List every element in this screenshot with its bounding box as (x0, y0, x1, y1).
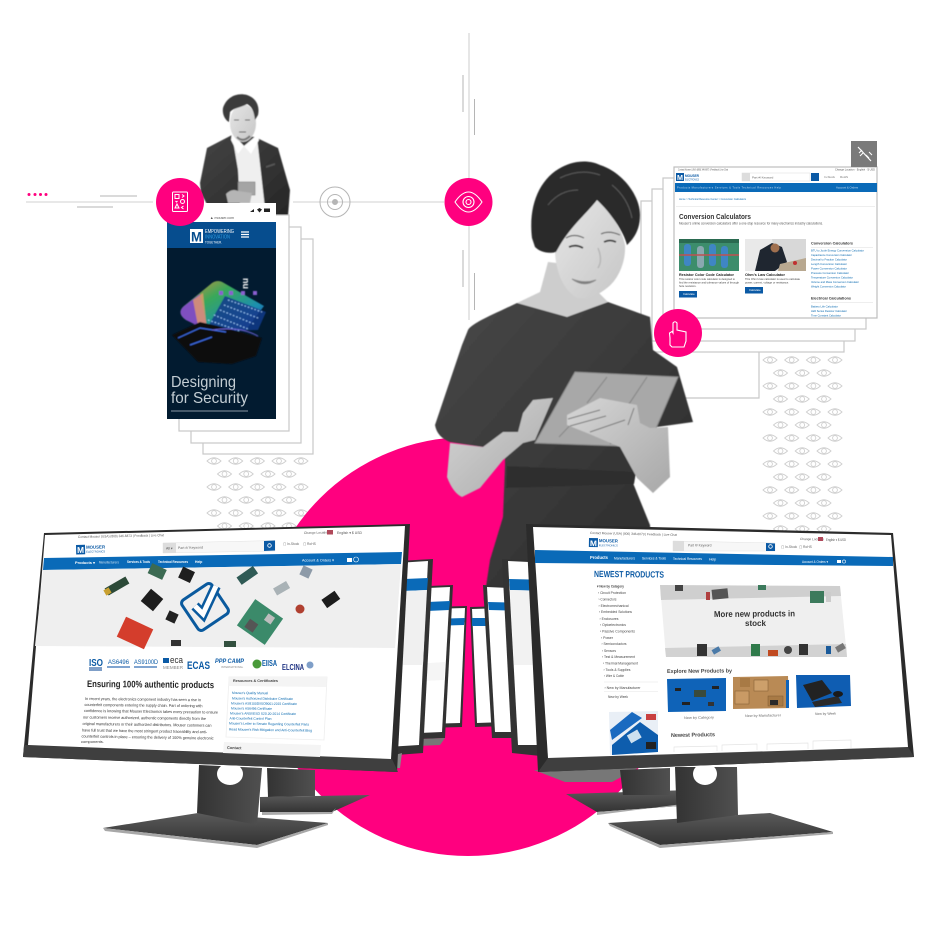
calculator links: Temperature Conversion Calculator (811, 276, 853, 280)
mobile logo: TOGETHER. (205, 240, 222, 244)
explore heading: Explore New Products by (667, 668, 733, 675)
certification logos: AS9100D (134, 659, 158, 666)
calculate buttons (679, 287, 763, 298)
calculators page: hole resistors. (679, 284, 697, 288)
sidebar categories: › Optoelectronics (600, 623, 626, 627)
monitor left 3 (397, 585, 453, 740)
page top bar: Contact Mouser (USA) (800) 346-6873 | Feedback | Live Chat (678, 168, 728, 172)
calculators page: Resistor Color Code Calculator (679, 273, 734, 277)
new products banner (660, 585, 847, 657)
calculator links: Battery Life Calculator (811, 304, 838, 308)
mobile logo: M (191, 228, 202, 244)
sidebar categories: › Thermal Management (603, 662, 638, 666)
pink circle (258, 437, 678, 856)
certification logos: INTERNATIONAL (221, 665, 244, 669)
nav bar: Manufacturers (99, 560, 119, 564)
sidebar categories: › Semiconductors (602, 642, 627, 646)
body paragraph: our customers receive authorized, authentic components directly from the (83, 715, 207, 721)
mobile logo (190, 228, 234, 244)
sidebar categories: › Sensors (602, 649, 616, 653)
newest products title: NEWEST PRODUCTS (594, 569, 664, 580)
mouser logo: MOUSER (599, 538, 619, 544)
page nav: Products Manufacturers Services & Tools Technical Resources Help (677, 186, 782, 190)
sidebar categories: New by Week (608, 695, 628, 699)
status bar icons (250, 208, 270, 212)
monitor right bezel (526, 524, 914, 772)
calculator links: Conversion Calculators (811, 240, 854, 246)
page logo: ELECTRONICS (685, 178, 699, 182)
monitor right screen: English ▾ $ USD (826, 538, 847, 542)
resources panel: Anti-Counterfeit Control Plan (229, 717, 272, 721)
mobile logo: INNOVATION (205, 234, 230, 240)
page logo: M (677, 175, 683, 182)
heading: Ensuring 100% authentic products (87, 679, 214, 691)
monitor left 2 stand (260, 753, 402, 815)
nav bar (535, 550, 893, 566)
calculators page: Ohm's Law Calculator (745, 273, 786, 277)
body paragraph: components. (81, 739, 104, 744)
target icon (320, 187, 350, 217)
certification logos: AS6496 (108, 659, 129, 666)
monitor right 4 (470, 606, 505, 727)
monitor left screen (28, 526, 405, 759)
certification logos: eca (170, 655, 183, 665)
search bar (742, 173, 819, 181)
sidebar categories (596, 584, 641, 699)
calculators page: Mouser's online conversion calculators offer a one-stop resource for many electronics industry calculations. (679, 222, 823, 226)
mobile page (167, 203, 276, 419)
body paragraph: counterfeit controls in place – ensuring the delivery of 100% genuine electronic (81, 734, 214, 741)
hamburger icon (241, 232, 249, 237)
monitor left 4 (425, 606, 467, 728)
mobile headline: Designing (171, 374, 236, 391)
sidebar categories: › Enclosures (600, 617, 619, 621)
left monitor (23, 524, 410, 848)
new products banner: More new products in (714, 608, 795, 619)
components (103, 563, 340, 649)
page logo: MOUSER (685, 174, 699, 178)
sidebar categories: › Circuit Protection (598, 591, 626, 595)
mouser logo: M (590, 539, 597, 548)
calculator links: Power Conversion Calculator (811, 266, 847, 270)
right monitor (526, 524, 914, 848)
calculators page: In-Stock (824, 175, 836, 179)
pink dots (28, 193, 48, 196)
resources panel: Resources & Certificates (233, 678, 278, 683)
sidebar categories: › Electromechanical (598, 604, 629, 608)
new products banner: stock (745, 619, 767, 628)
mouser logo: M (77, 545, 84, 555)
security artwork (172, 278, 266, 364)
connector lines (26, 33, 474, 320)
monitor right screen: ▢ RoHS (799, 545, 813, 549)
search box: Part #/ Keyword (688, 544, 712, 548)
monitor right screen: New by Manufacturer (745, 713, 782, 718)
calculators page: This Ohm's law calculator is used to calculate (745, 277, 800, 281)
woman with tablet (435, 161, 693, 600)
resources panel: Mouser's ANSI/ESD S20.20-2014 Certificate (230, 712, 296, 716)
page nav (675, 183, 877, 192)
monitor stack left back (260, 559, 467, 815)
monitor left screen: English ▾ $ USD (337, 531, 363, 535)
contact panel: Contact (227, 745, 242, 750)
ghost pages behind calculators (640, 178, 866, 398)
body paragraph: confidence is knowing that Mouser Electronics takes every precaution to ensure (84, 708, 219, 715)
certification logos: ISO (89, 658, 103, 669)
calculator links: Pressure Conversion Calculator (811, 271, 849, 275)
nav bar: Account & Orders ▾ (802, 560, 828, 564)
mobile logo: EMPOWERING (205, 229, 234, 235)
calculator links: Capacitance Conversion Calculator (811, 253, 852, 257)
monitor left screen: Contact Mouser (USA) (800) 346-6873 | Feedback | Live Chat (78, 533, 164, 539)
resources panel: Mouser's Letter to Senate Regarding Counterfeit Parts (229, 722, 309, 727)
search box (673, 541, 775, 551)
body paragraph: counterfeit components entering the supply chain. Part of ordering with (84, 702, 203, 708)
monitor left bezel (23, 524, 410, 772)
explore image: category (667, 678, 726, 712)
eye pattern right (763, 357, 842, 532)
body paragraph: In recent years, the electronics component industry has seen a rise in (85, 696, 201, 702)
calculator links: Length Conversion Calculator (811, 262, 847, 266)
icon: pointing hand (654, 309, 702, 357)
monitor right screen: New by Category (684, 715, 714, 720)
product cards (674, 740, 851, 752)
monitor right stand (608, 763, 833, 848)
calculators page: find the resistance and tolerance values of through (679, 280, 739, 284)
resources panel: Mouser's AS9100D/ISO9001:2015 Certificate (231, 702, 297, 706)
resources panel: Mouser's Authorized Distributor Certificate (232, 697, 293, 701)
contact panel (223, 742, 321, 757)
calculators page: This resistor color code calculator is designed to (679, 277, 735, 281)
calculator links: Decimal to Fraction Calculator (811, 258, 847, 262)
monitor right screen (533, 527, 908, 758)
url: ▲ mouser.com (210, 216, 234, 220)
calculator links: BTU to Joule Energy Conversion Calculator (811, 248, 864, 252)
security artwork: nu (241, 278, 251, 289)
mobile header (167, 222, 276, 248)
calculators page (674, 167, 877, 318)
certification logos: ELCINA (282, 662, 304, 672)
sidebar categories: ▾ New by Category (596, 584, 624, 588)
nav bar: Technical Resources (673, 557, 702, 561)
search box (163, 540, 275, 553)
monitor left 2 (370, 559, 433, 757)
page title: Conversion Calculators (679, 212, 751, 221)
monitor right screen: ▢ In-Stock (781, 545, 797, 549)
nav bar: Account & Orders ▾ (302, 558, 334, 562)
mouser logo: ELECTRONICS (86, 549, 105, 554)
catalog image (609, 711, 658, 755)
icon: shapes form (156, 178, 204, 226)
resistor photo (679, 239, 739, 271)
body paragraph: have full trust that we have the most stringent product traceability and anti- (82, 728, 208, 734)
nav bar: Services & Tools (127, 560, 150, 564)
resources panel: Mouser's Quality Manual (232, 691, 268, 695)
monitor stack right back (470, 559, 690, 815)
calculator links (811, 240, 864, 318)
calculator links: LED Series Resistor Calculator (811, 309, 847, 313)
monitor left screen: ▢ RoHS (303, 542, 317, 546)
monitor right screen: Contact Mouser (USA) (800) 346-6873 | Feedback | Live Chat (590, 531, 677, 537)
monitor left screen: ▢ In-Stock (283, 542, 299, 546)
search bar: Part #/ Keyword (752, 176, 774, 180)
page nav: Account & Orders (836, 186, 859, 190)
monitor left screen: Change Location (304, 530, 329, 535)
calculator links: Volume and Mass Conversion Calculator (811, 280, 859, 284)
calculators page: power, current, voltage or resistance. (745, 280, 789, 284)
resources panel (226, 677, 327, 740)
body paragraph (81, 696, 219, 744)
certification logos: EIISA (262, 659, 277, 668)
calculators page: Home > Technical Resource Center > Conversion Calculators (679, 197, 746, 201)
sidebar categories: › Passive Components (600, 630, 635, 634)
sidebar categories: › Connectors (598, 598, 617, 602)
search box: Part #/ Keyword (178, 546, 203, 550)
calculators page: RoHS (840, 175, 848, 179)
newest products heading: Newest Products (671, 732, 715, 739)
sidebar categories: › Test & Measurement (602, 655, 635, 659)
monitor right 3 (483, 585, 530, 738)
sidebar categories: › New by Manufacturer (604, 686, 641, 690)
body paragraph: original manufacturers or their authorized distributors. Mouser customers can (82, 721, 212, 728)
sidebar categories: › Embedded Solutions (599, 610, 632, 614)
man with phone (200, 94, 290, 216)
certification logos: PPP CAMP (215, 659, 245, 665)
mouser logo: ELECTRONICS (599, 543, 618, 548)
calculate buttons: Calculate (683, 292, 695, 296)
nav bar: Help (709, 558, 716, 562)
nav bar: Manufacturers (614, 556, 635, 560)
certification logos: MEMBER (163, 665, 184, 670)
percent icon tile (851, 141, 877, 167)
calculator links: Weight Conversion Calculator (811, 284, 846, 288)
certification logos (89, 655, 314, 672)
explore image: week (796, 675, 851, 708)
nav bar (43, 552, 402, 570)
resources panel: Read Mouser's Risk Mitigation and Anti-Counterfeit Blog (229, 728, 312, 733)
mobile ghost pages (179, 215, 313, 454)
page logo (676, 173, 699, 182)
resources panel: Mouser's AS6496 Certificate (231, 707, 272, 711)
mouser logo (76, 544, 106, 555)
calculator links: Time Constant Calculator (811, 314, 841, 318)
mobile page: for Security (171, 390, 248, 407)
search box: All ▾ (166, 546, 173, 550)
icon: eye (444, 178, 492, 226)
sidebar categories: › Power (601, 636, 614, 640)
explore image: manufacturer (733, 676, 789, 709)
monitor left stand (103, 763, 328, 848)
monitor right 2 stand (566, 768, 690, 815)
mouser logo (589, 538, 619, 549)
hero banner (35, 564, 401, 648)
ohm's law photo (745, 239, 806, 271)
checkmark badge (180, 582, 230, 632)
nav bar: Products ▾ (75, 561, 95, 565)
calculator links: Electrical Calculations (811, 296, 852, 300)
nav bar: Technical Resources (158, 560, 188, 564)
nav bar: Help (195, 560, 202, 564)
calculators page: Change Location · English · $ USD (835, 168, 875, 172)
eye pattern left (207, 458, 308, 529)
monitor right screen: New by Week (815, 712, 836, 716)
monitor right screen: Change Location (800, 537, 824, 541)
calculate buttons: Calculate (749, 288, 761, 292)
mouser logo: MOUSER (86, 544, 106, 550)
sidebar categories: › Tools & Supplies (604, 668, 631, 672)
certification logos: ECAS (187, 660, 210, 672)
nav bar: Services & Tools (642, 556, 666, 560)
nav bar: Products (590, 555, 609, 560)
monitor right 2 (502, 559, 550, 757)
sidebar categories: › Wire & Cable (604, 674, 624, 678)
